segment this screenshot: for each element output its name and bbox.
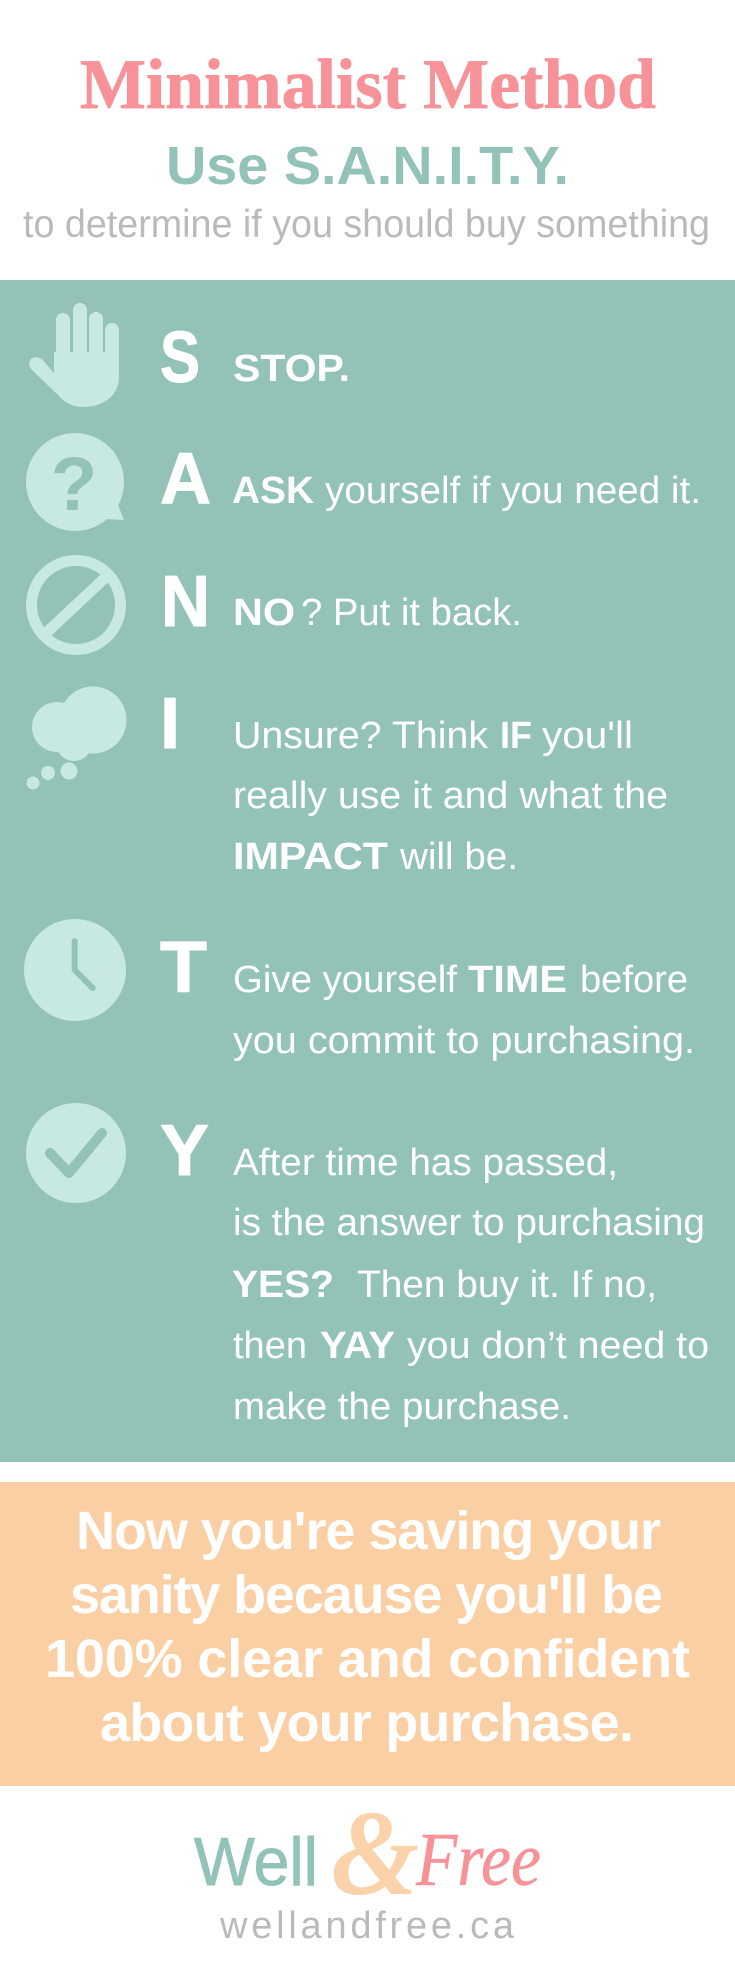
text: time: you commit to purchasing.	[233, 1020, 695, 1062]
text: if / impact	[233, 715, 668, 878]
panel: conclusion banner: Now you're saving your	[76, 1501, 661, 1561]
panel: S.A.N.I.T.Y. steps	[0, 280, 735, 1462]
text: time: Give yourself	[233, 959, 457, 1001]
text: yes / yay: YES?	[232, 1264, 334, 1306]
text: if / impact: Unsure? Think	[233, 715, 489, 757]
panel: conclusion banner	[0, 1482, 735, 1786]
text: if / impact: will be.	[399, 836, 518, 878]
text: yes / yay: then	[233, 1325, 307, 1367]
tagline: to determine if you should buy something	[23, 203, 710, 246]
text: time: before	[580, 959, 688, 1001]
text: if / impact: you'll	[542, 715, 633, 757]
text: if / impact: really use it and what the	[233, 775, 668, 817]
text: ask: ASK	[232, 470, 315, 512]
letter N: N	[161, 562, 210, 642]
icon: clock	[24, 919, 126, 1021]
letter T: T	[160, 928, 207, 1008]
subtitle: Use S.A.N.I.T.Y.	[166, 136, 569, 196]
panel: conclusion banner: about your purchase.	[100, 1693, 634, 1753]
text: time: TIME	[468, 959, 567, 1001]
icon: question bubble	[26, 433, 124, 531]
panel: conclusion banner: 100% clear and confident	[45, 1629, 690, 1689]
text: yes / yay	[232, 1142, 709, 1428]
icon: stop hand	[29, 303, 119, 407]
logo: Well & Free: &	[331, 1786, 419, 1921]
logo: Well & Free: Free	[415, 1818, 541, 1902]
panel: conclusion banner: sanity because you'll be	[70, 1565, 663, 1625]
title: Minimalist Method	[80, 46, 656, 124]
letter S: S	[160, 318, 200, 398]
text: no: NO	[233, 592, 295, 634]
text: yes / yay: Then buy it. If no,	[357, 1264, 657, 1306]
letter Y: Y	[160, 1111, 209, 1191]
text: if / impact: IF	[500, 715, 532, 757]
text: stop: STOP.	[233, 348, 350, 390]
website url: wellandfree.ca	[219, 1905, 515, 1947]
letter A: A	[160, 439, 211, 519]
text: yes / yay: you don’t need to	[407, 1325, 709, 1367]
text: yes / yay: make the purchase.	[233, 1386, 571, 1428]
text: yes / yay: After time has passed,	[233, 1142, 618, 1184]
letter I: I	[160, 684, 180, 764]
icon: thought cloud	[26, 686, 126, 790]
logo: Well & Free: Well	[194, 1824, 318, 1900]
icon: check mark	[26, 1103, 126, 1203]
logo: Well & Free	[194, 1786, 541, 1921]
text: yes / yay: is the answer to purchasing	[233, 1202, 705, 1244]
icon: no sign	[32, 560, 120, 650]
text: yes / yay: YAY	[320, 1325, 395, 1367]
text: time	[233, 959, 695, 1062]
text: no: ? Put it back.	[301, 592, 522, 634]
text: if / impact: IMPACT	[233, 836, 388, 878]
text: ask: yourself if you need it.	[325, 470, 701, 512]
icon: question bubble: ?	[51, 442, 97, 527]
